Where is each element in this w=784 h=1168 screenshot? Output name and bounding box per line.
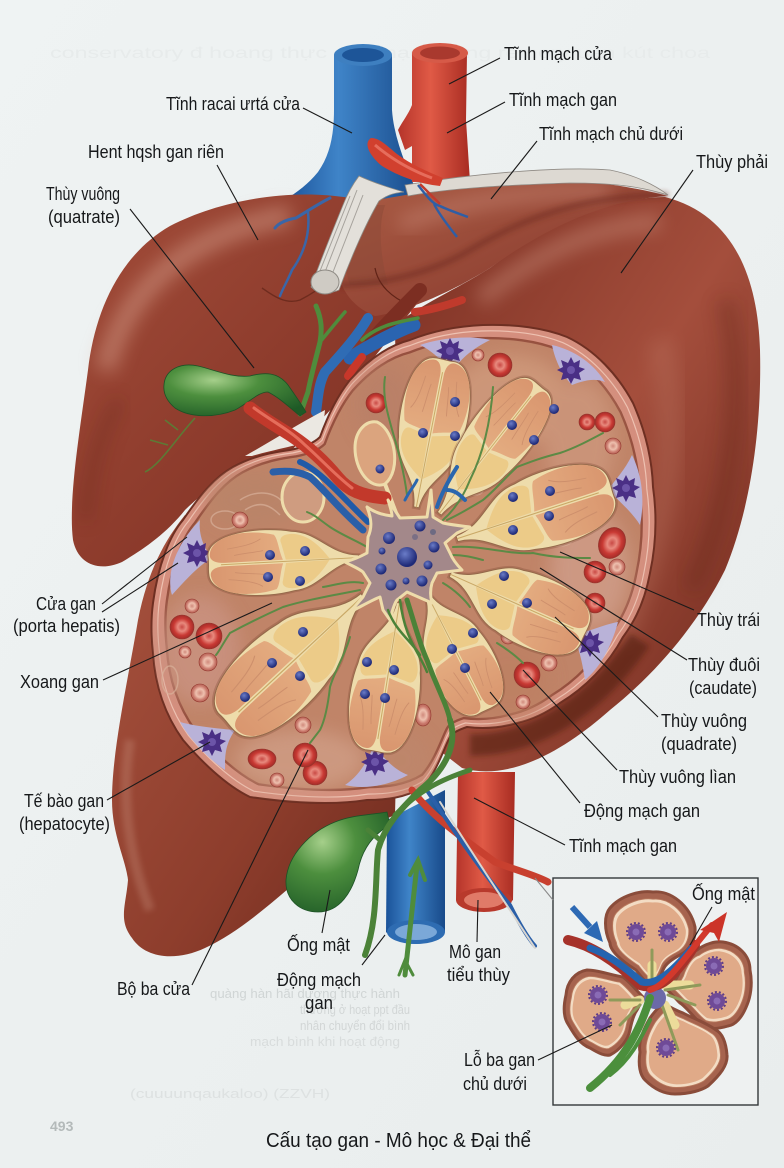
section: tissue blotches [160, 355, 630, 790]
ligament: falciform cord [311, 176, 404, 294]
vessel: blue inferior stump [386, 790, 445, 944]
icon: green arrow on blue stump [399, 860, 425, 975]
label: Tĩnh mạch gan: Tĩnh mạch gan [509, 90, 617, 110]
icon: stellate cell [557, 357, 585, 384]
label: Thùy phải: Thùy phải [696, 152, 768, 172]
inset: lobe left [564, 970, 643, 1055]
label: Thùy trái [560, 552, 760, 630]
faint show-through text from the reverse page: thường ở hoạt ppt đầu [300, 1002, 410, 1017]
label: Tĩnh mạch gan [447, 90, 617, 133]
label: Bộ ba cửa [117, 750, 308, 999]
label: Thùy vuông (quadrate) [555, 617, 747, 754]
gallbladder: lower [286, 812, 390, 912]
faint show-through text from the reverse page: 493 [50, 1118, 74, 1134]
leader from the lower vessels to the inset [535, 878, 553, 900]
label: Xoang gan [20, 603, 272, 692]
inset: lobe right [667, 942, 751, 1028]
label: Thùy vuông lìan: Thùy vuông lìan [619, 767, 736, 787]
inset: central ducts [610, 950, 700, 1050]
icon: stellate cell [183, 540, 211, 567]
icon: stellate cell [576, 630, 604, 657]
section: central hub [345, 490, 470, 620]
label: Tĩnh mạch chủ dưới: Tĩnh mạch chủ dưới [539, 124, 683, 144]
label: Thùy đuôi (caudate): (caudate) [689, 678, 757, 698]
label: Tĩnh mạch chủ dưới [491, 124, 683, 199]
label: Thùy vuông (quadrate): Thùy vuông [661, 711, 747, 731]
liver section [152, 325, 655, 803]
label: Động mạch gan right [490, 692, 700, 821]
inset panel: lobule diagram [553, 878, 758, 1105]
label: Tế bào gan (hepatocyte) [19, 742, 210, 834]
label: Mô gan tiểu thùy: tiểu thùy [447, 965, 510, 985]
title caption: Cấu tạo gan - Mô học & Đại thể [266, 1130, 531, 1152]
inset: lobe bottom [639, 1003, 727, 1094]
label: Tĩnh racai ưrtá cửa: Tĩnh racai ưrtá cửa [166, 94, 301, 114]
label: Thùy đuôi (caudate): Thùy đuôi [688, 655, 760, 675]
icon: stellate cell [361, 749, 389, 776]
liver: right lobe [395, 197, 760, 771]
liver: left lobe [72, 194, 420, 566]
inset label: Ống mật [690, 883, 755, 945]
label: Cửa gan (porta hepatis): Cửa gan [36, 594, 96, 614]
vessels and ducts above the section [300, 290, 462, 414]
icon: stellate cell [612, 475, 640, 502]
label: Động mạch gan: gan [305, 993, 333, 1013]
label: Thùy vuông (quadrate): (quadrate) [661, 734, 737, 754]
faint show-through text from the reverse page [50, 45, 710, 1134]
section: green bile ducts [216, 377, 603, 743]
section: blue branches [273, 462, 465, 530]
ducts and vessels below the section [365, 600, 548, 955]
section: lobule arms [198, 353, 624, 757]
label: Hent hqsh gan riên [88, 142, 258, 240]
label: Thùy vuông lìan [523, 670, 736, 787]
section: pink capsule [152, 325, 655, 803]
inset: blue and red vessels [568, 925, 712, 990]
label: Tĩnh mạch cửa [449, 44, 613, 84]
label: Bộ ba cửa: Bộ ba cửa [117, 979, 191, 999]
label: Tĩnh racai ưrtá cửa [166, 94, 352, 133]
label: Lỗ ba gan chủ dưới: Lỗ ba gan [464, 1049, 535, 1070]
label: Tế bào gan (hepatocyte): (hepatocyte) [19, 814, 110, 834]
label: Thùy vuông (quatrate) [46, 184, 254, 368]
icon: blue arrow to the lower right [572, 907, 603, 942]
label: Xoang gan: Xoang gan [20, 672, 99, 692]
label: Tế bào gan (hepatocyte): Tế bào gan [24, 791, 104, 811]
inset label: Ống mật: Ống mật [692, 883, 755, 904]
section: lavender portal wedges with stellate cells [170, 338, 642, 787]
label: Ống mật [287, 890, 350, 955]
label: Mô gan tiểu thùy [447, 900, 510, 985]
faint show-through text from the reverse page: conservatory đ hoang thực của mạch cũng remory uạn kút choa [50, 45, 710, 62]
label: Tĩnh mạch gan lower: Tĩnh mạch gan [569, 836, 677, 856]
label: Hent hqsh gan riên: Hent hqsh gan riên [88, 142, 224, 162]
inset: lobe top [606, 892, 695, 987]
faint show-through text from the reverse page: (cuuuunqaukaloo) (ZZVH) [130, 1086, 330, 1101]
liver: lower lobe [112, 515, 400, 956]
icon: lobe stellate cells [589, 923, 726, 1057]
section: blood cells [170, 349, 631, 787]
label: Thùy đuôi (caudate) [540, 568, 760, 698]
ligament: white band by the artery [245, 410, 325, 456]
label: Thùy phải [621, 152, 768, 273]
label: Cửa gan (porta hepatis) [13, 537, 187, 636]
label: Mô gan tiểu thùy: Mô gan [449, 942, 501, 962]
label: Thùy vuông (quatrate): Thùy vuông [46, 184, 120, 204]
faint show-through text from the reverse page: quàng hàn hãi dương thực hành [210, 986, 400, 1001]
label: Động mạch gan right: Động mạch gan [584, 801, 700, 821]
vessel: branches on left lobe [275, 198, 330, 296]
vessel: blue vein at top [284, 44, 420, 200]
label: Tĩnh mạch cửa: Tĩnh mạch cửa [504, 44, 613, 64]
label: Cửa gan (porta hepatis): (porta hepatis) [13, 616, 120, 636]
vessel: red inferior stump [456, 772, 515, 912]
icon: stellate cell [436, 338, 464, 365]
liver: central upper lobe [336, 180, 668, 316]
faint show-through text from the reverse page: mạch bình khi hoạt động [250, 1034, 400, 1049]
label: Động mạch gan: Động mạch [277, 970, 361, 990]
section: hepatocyte nuclei [240, 397, 559, 703]
label: Ống mật: Ống mật [287, 934, 350, 955]
label: Lỗ ba gan chủ dưới: chủ dưới [463, 1074, 527, 1094]
label: Động mạch gan [277, 935, 385, 1013]
gallbladder: upper [164, 365, 306, 416]
faint show-through text from the reverse page: nhân chuyển đổi bình [300, 1018, 410, 1033]
label: Tĩnh mạch gan lower [474, 798, 677, 856]
icon: red arrow to the upper right [700, 912, 727, 942]
vessel: red vein at top [398, 43, 470, 182]
label: Thùy trái: Thùy trái [697, 610, 760, 630]
label: Thùy vuông (quatrate): (quatrate) [48, 207, 120, 227]
vessel: hepatic artery entering the section [250, 408, 385, 498]
ligament: band across the top of the liver [405, 169, 668, 196]
inset: green duct [590, 998, 650, 1088]
icon: stellate cell [198, 729, 226, 756]
label: Lỗ ba gan chủ dưới [463, 1025, 612, 1094]
vessel: hepatic artery top [367, 138, 468, 237]
